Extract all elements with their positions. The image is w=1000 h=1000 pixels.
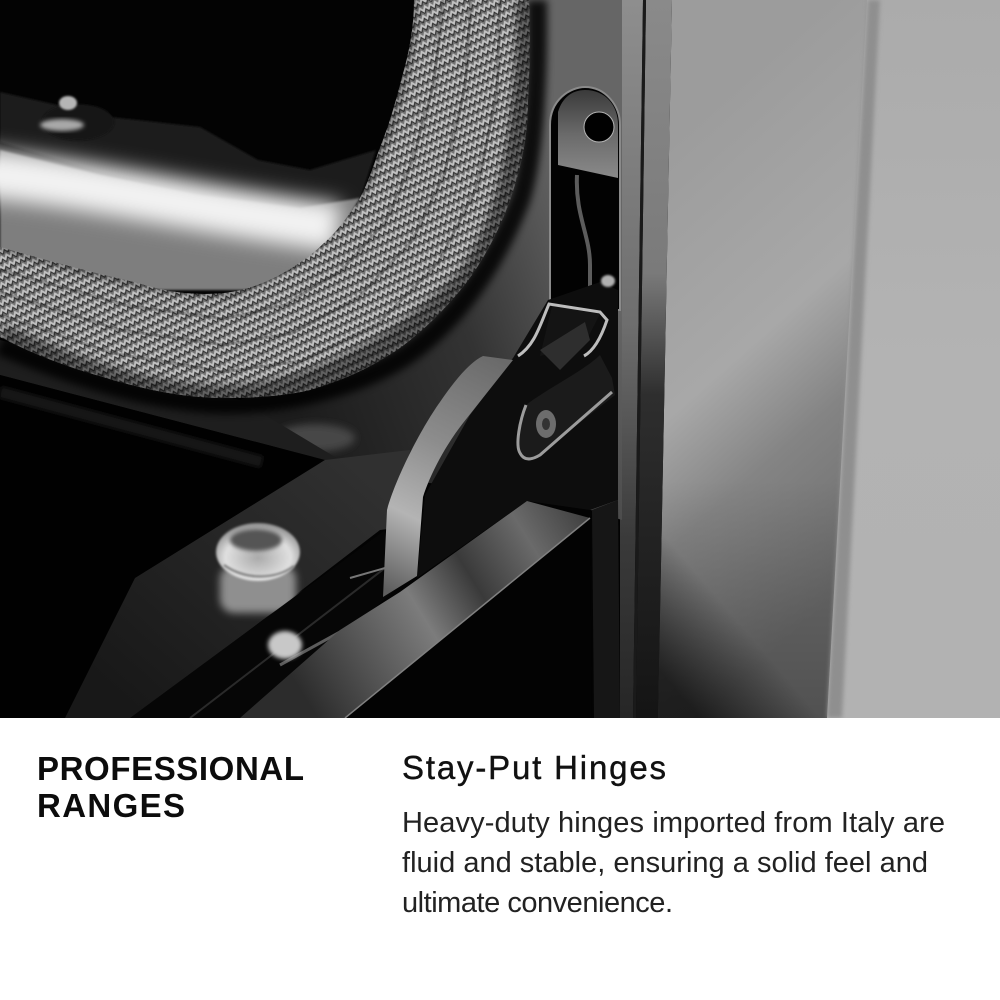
hinge steel blade	[383, 356, 513, 597]
text block: feature description: ultimate convenience.	[402, 887, 673, 919]
icon: phillips screw	[216, 523, 300, 613]
steel bar base	[0, 150, 360, 290]
door inner dark frame	[345, 518, 592, 718]
hinge slot	[550, 87, 620, 310]
lower door channel with spring	[130, 567, 384, 718]
black hinge pocket	[592, 500, 620, 718]
braided door gasket hose	[0, 0, 540, 400]
hinge pivot link	[517, 355, 615, 459]
photo: oven door hinge close-up	[0, 0, 1000, 718]
door frame edge line	[345, 518, 590, 718]
wall soft reflection	[275, 424, 355, 452]
wall band under hose	[0, 340, 340, 460]
title: product line: RANGES	[37, 787, 185, 824]
angled door plate	[65, 450, 410, 718]
black oven door glass	[272, 446, 324, 462]
side panel, light matte	[820, 0, 1000, 718]
dark bar flange above the bright band	[0, 92, 376, 210]
title: product line	[37, 750, 304, 824]
door glass edge line	[0, 392, 262, 462]
hinge arm black body	[417, 282, 618, 578]
text block: feature description	[402, 807, 945, 919]
steel bar bright highlight	[0, 172, 338, 228]
glossy door top surface	[240, 501, 590, 718]
brushed stainless panel	[658, 0, 880, 718]
hinge loop highlight	[518, 275, 615, 370]
metal wall behind hose	[240, 0, 622, 520]
text block: feature description: fluid and stable, ensuring a solid feel and	[402, 847, 928, 879]
heading: feature name: Stay-Put Hinges	[402, 749, 666, 786]
icon: rivet on steel bar	[40, 96, 114, 140]
hose cast shadow	[0, 0, 537, 404]
text block: feature description: Heavy-duty hinges imported from Italy are	[402, 807, 945, 839]
metal frame strips	[620, 0, 672, 718]
title: product line: PROFESSIONAL	[37, 750, 304, 787]
